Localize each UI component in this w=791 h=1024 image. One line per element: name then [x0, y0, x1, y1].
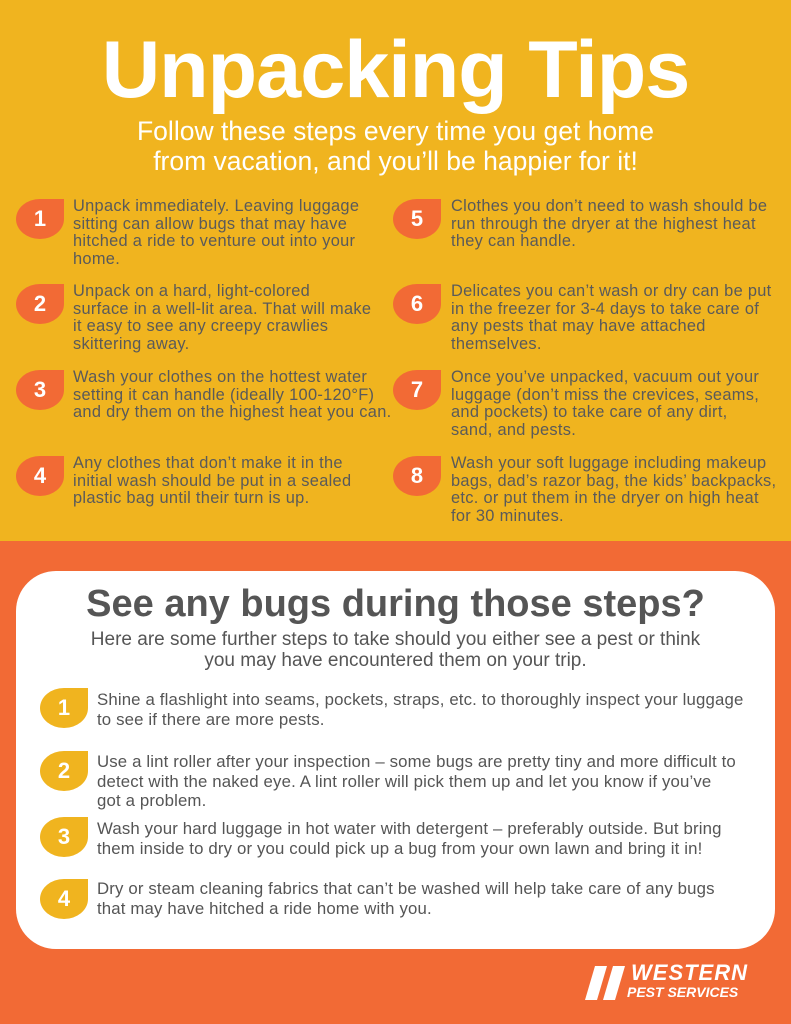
badge 6: 6: [411, 291, 423, 316]
tip 7: and pockets) to take care of any dirt,: [451, 403, 728, 421]
tip 7: [451, 368, 759, 439]
tip 1: [73, 197, 359, 268]
subtitle: from vacation, and you’ll be happier for it!: [153, 146, 638, 176]
badge 3: [40, 817, 88, 857]
subtitle: Follow these steps every time you get home: [137, 116, 654, 146]
tip 2: Unpack on a hard, light-colored: [73, 282, 310, 300]
tip 4: plastic bag until their turn is up.: [73, 489, 309, 507]
tip 6: [451, 282, 772, 353]
tip 6: themselves.: [451, 335, 542, 353]
step 1: to see if there are more pests.: [97, 710, 325, 728]
tip 1: home.: [73, 250, 120, 268]
intro text: [91, 629, 700, 671]
step 2: Use a lint roller after your inspection – some bugs are pretty tiny and more difficult to: [97, 752, 736, 771]
tip 5: Clothes you don’t need to wash should be: [451, 197, 767, 215]
badge 1: [40, 688, 88, 728]
tip 5: they can handle.: [451, 232, 576, 250]
tip 3: and dry them on the highest heat you can.: [73, 403, 391, 421]
tip 1: Unpack immediately. Leaving luggage: [73, 197, 359, 215]
logo stripes: [585, 966, 625, 1000]
badge 4: 4: [34, 463, 46, 488]
badge 4: [40, 879, 88, 919]
subtitle: [137, 116, 654, 176]
intro text: Here are some further steps to take should you either see a pest or think: [91, 629, 700, 650]
tip 2: it easy to see any creepy crawlies: [73, 317, 328, 335]
step 3: Wash your hard luggage in hot water with detergent – preferably outside. But bring: [97, 819, 722, 838]
tip 4: [73, 454, 351, 507]
step 2: [97, 752, 736, 810]
tip 3: [73, 368, 391, 421]
tip 7: Once you’ve unpacked, vacuum out your: [451, 368, 759, 386]
step 1: [97, 690, 743, 728]
badge 2: 2: [34, 291, 46, 316]
step 3: them inside to dry or you could pick up a bug from your own lawn and bring it in!: [97, 838, 702, 858]
tip 4: Any clothes that don’t make it in the: [73, 454, 343, 472]
badge 3: 3: [34, 377, 46, 402]
badge 8: [393, 456, 441, 496]
panel: see any bugs: [16, 571, 775, 949]
tip 4: initial wash should be put in a sealed: [73, 472, 351, 490]
badge 7: [393, 370, 441, 410]
step 1: Shine a flashlight into seams, pockets, straps, etc. to thoroughly inspect your luggage: [97, 690, 743, 709]
heading: See any bugs during those steps?: [86, 583, 705, 625]
badge 8: 8: [411, 463, 423, 488]
tip 2: skittering away.: [73, 335, 190, 353]
badge 7: 7: [411, 377, 423, 402]
step 4: that may have hitched a ride home with you.: [97, 898, 432, 918]
tip 6: in the freezer for 3-4 days to take care of: [451, 300, 759, 318]
logo: [585, 960, 748, 1000]
title: Unpacking Tips: [102, 25, 689, 115]
badge 4: [16, 456, 64, 496]
tip 7: sand, and pests.: [451, 421, 576, 439]
tip 3: setting it can handle (ideally 100-120°F): [73, 386, 374, 404]
badge 1: 1: [34, 206, 46, 231]
tip 8: [451, 454, 776, 525]
badge 5: [393, 199, 441, 239]
tip 2: surface in a well-lit area. That will make: [73, 300, 371, 318]
tip 6: any pests that may have attached: [451, 317, 706, 335]
tip 8: for 30 minutes.: [451, 507, 564, 525]
tip 1: sitting can allow bugs that may have: [73, 215, 347, 233]
badge 1: [16, 199, 64, 239]
tip 2: [73, 282, 371, 353]
tip 6: Delicates you can’t wash or dry can be put: [451, 282, 772, 300]
tip 1: hitched a ride to venture out into your: [73, 232, 355, 250]
step 2: got a problem.: [97, 791, 206, 810]
tip 8: bags, dad’s razor bag, the kids’ backpacks,: [451, 472, 776, 490]
tip 5: run through the dryer at the highest heat: [451, 215, 756, 233]
tip 5: [451, 197, 767, 250]
badge 2: [40, 751, 88, 791]
badge 5: 5: [411, 206, 423, 231]
logo: PEST SERVICES: [627, 984, 738, 1000]
tip 8: Wash your soft luggage including makeup: [451, 454, 766, 472]
tip 3: Wash your clothes on the hottest water: [73, 368, 367, 386]
logo text: WESTERN: [631, 960, 748, 985]
badge 3: 3: [58, 824, 70, 849]
badge 4: 4: [58, 886, 70, 911]
panel: unpacking tips: [0, 0, 791, 541]
badge 1: 1: [58, 695, 70, 720]
step 3: [97, 819, 722, 858]
badge 2: 2: [58, 758, 70, 783]
tip 8: etc. or put them in the dryer on high heat: [451, 489, 759, 507]
step 4: Dry or steam cleaning fabrics that can’t be washed will help take care of any bugs: [97, 879, 715, 898]
step 4: [97, 879, 715, 918]
badge 2: [16, 284, 64, 324]
badge 6: [393, 284, 441, 324]
tip 7: luggage (don’t miss the crevices, seams,: [451, 386, 759, 404]
badge 3: [16, 370, 64, 410]
intro text: you may have encountered them on your trip.: [204, 650, 587, 671]
step 2: detect with the naked eye. A lint roller will pick them up and let you know if you’ve: [97, 772, 711, 790]
